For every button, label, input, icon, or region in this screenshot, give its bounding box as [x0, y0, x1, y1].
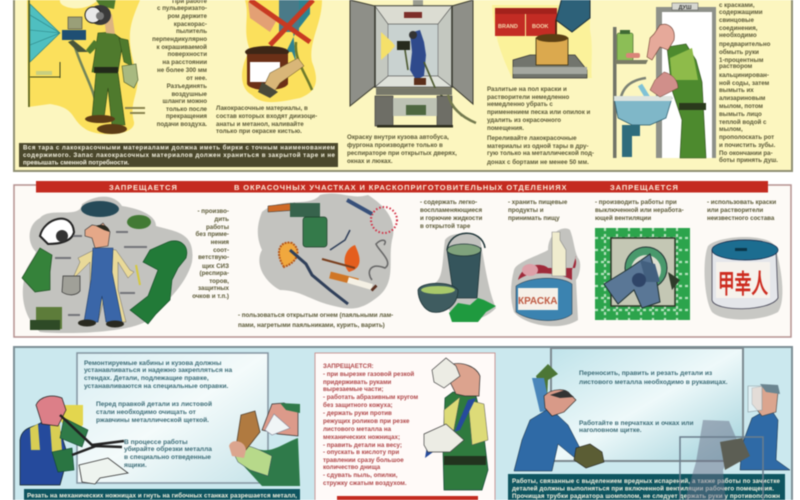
- text: unknown paint rule: - использовать краски: [707, 199, 776, 206]
- text: spray rule: от нее.: [186, 75, 207, 82]
- text: without PPE: без приме-: [196, 231, 229, 238]
- illustration: worker with metal shears: [20, 396, 128, 485]
- text: spilled paint rule: гую только на металлической под-: [487, 150, 594, 157]
- text: open flame rule: [238, 312, 393, 329]
- panel: prohibited in paint areas: [14, 181, 791, 337]
- text: skin washing rule: прополоскать рот: [719, 134, 774, 141]
- panel: prohibited actions: ЗАПРЕЩАЕТСЯ:: [323, 363, 374, 370]
- callout: container storage rule: [19, 143, 338, 167]
- board: glove and goggles instructions: Переносить, править и резать детали из: [579, 370, 713, 377]
- text: without PPE: соот-: [213, 247, 229, 254]
- text: skin washing rule: предварительно: [719, 41, 771, 48]
- panel: prohibited actions: [315, 353, 495, 500]
- callout: harmful vapors rule: Прочищая трубки радиатора шомполом, не следует держать руки у противоположн: [512, 493, 780, 500]
- text: spilled paint rule: донах с бортами не менее 50 мм.: [487, 159, 589, 166]
- text: ventilation rule: ющей вентиляции: [595, 215, 651, 222]
- text: skin washing rule: содержащими: [719, 9, 763, 16]
- text: without PPE: [192, 208, 230, 300]
- banner: prohibited heading: ЗАПРЕЩАЕТСЯ: [610, 183, 679, 192]
- panel: prohibited actions: - при вырезке газовой резкой: [323, 371, 414, 378]
- text: skin washing rule: соединения,: [719, 25, 758, 32]
- text: open flame rule: пами, нагретыми паяльниками, курить, варить): [238, 322, 385, 329]
- banner: lower red strip: [337, 496, 478, 500]
- text: skin washing rule: вымыть их: [719, 87, 754, 94]
- text: spray rule: не более 300 мм: [157, 67, 207, 74]
- text: without PPE: нения: [211, 239, 229, 246]
- board: repair instructions: стали необходимо очищать от: [96, 408, 197, 416]
- text: spray rule: Разъединять: [167, 83, 207, 90]
- text: flammable liquids rule: - содержать легко-: [420, 199, 477, 206]
- text: spilled paint rule: немедленно убрать с: [487, 101, 553, 108]
- illustration: worker with wire brush: [229, 403, 300, 486]
- text: ventilation rule: выключенной или неработа-: [595, 207, 684, 214]
- illustration: paint can with milk bottle: КРАСКА: [518, 296, 557, 307]
- text: booth rule: окнах и люках.: [347, 158, 393, 165]
- watermark logo: [680, 420, 763, 500]
- text: open flame rule: - пользоваться открытым огнем (паяльными лам-: [238, 312, 393, 319]
- text: booth rule: респираторе при открытых дверях,: [347, 150, 457, 157]
- text: without PPE: ветствую-: [198, 254, 229, 261]
- text: without PPE: - произво-: [197, 208, 229, 215]
- text: spray rule: к окрашиваемой: [157, 44, 207, 51]
- text: spray rule: краскорас-: [174, 21, 207, 28]
- panel: prohibited actions: - опускать в кислоту при: [323, 449, 399, 456]
- text: spilled paint rule: растворители немедленно: [487, 94, 570, 101]
- text: flammable liquids rule: и горючие жидкости: [420, 215, 482, 222]
- banner: prohibited heading: ЗАПРЕЩАЕТСЯ: [109, 183, 178, 192]
- panel: prohibited actions: травлении сразу большое: [323, 457, 404, 464]
- text: without PPE: торов,: [209, 278, 229, 285]
- illustration: paint can with milk bottle: [511, 228, 580, 326]
- text: spilled paint rule: Переливайте лакокрасочные: [487, 135, 577, 142]
- text: skin washing rule: свинцовые: [719, 17, 754, 24]
- illustration: spray painter: [27, 0, 145, 134]
- text: skin washing rule: теплой водой с: [719, 119, 767, 126]
- panel: prohibited actions: - править детали на весу;: [323, 442, 402, 449]
- text: spray rule: прекращения: [166, 113, 207, 120]
- panel: prohibited actions: листового металла на: [323, 426, 392, 433]
- text: ventilation rule: - производить работы при: [595, 199, 677, 206]
- text: spray rule: на расстоянии: [162, 59, 207, 66]
- text: skin washing rule: мылом, потом: [719, 103, 763, 110]
- panel: prohibited actions: режущих роликов при резке: [323, 418, 410, 425]
- text: spilled paint rule: [487, 86, 594, 166]
- text: spray rule: пылитель: [176, 28, 207, 35]
- text: lacquer materials: анаты и метанол, наливайте: [216, 121, 304, 128]
- panel: prohibited actions: - держать руки против: [323, 410, 392, 417]
- illustration: worker washing at sink: [613, 3, 716, 158]
- text: unknown paint rule: неизвестного состава: [707, 215, 775, 222]
- text: booth rule: Окраску внутри кузова автобуса,: [347, 134, 449, 141]
- text: spray rule: перпендикулярно: [152, 36, 207, 43]
- text: lacquer materials: состав которых входят диизоци-: [216, 113, 317, 120]
- text: spray rule: подачи воздуха.: [157, 121, 207, 128]
- illustration: spray booth: [350, 0, 476, 128]
- text: booth rule: [347, 134, 457, 165]
- text: spray rule: [152, 0, 208, 128]
- callout: container storage rule: содержимого. Запас лакокрасочных материалов должен храниться в закрытой таре и не: [23, 152, 336, 159]
- illustration: worker and protective equipment: [22, 197, 193, 333]
- board: glove and goggles instructions: наголовном щитке.: [579, 427, 642, 434]
- text: without PPE: дить: [214, 216, 229, 223]
- board: repair instructions: ржавчины металлической щеткой.: [96, 416, 209, 424]
- board: glove and goggles instructions: Работайте в перчатках и очках или: [579, 419, 694, 427]
- text: skin washing rule: мылом,: [719, 126, 743, 133]
- text: skin washing rule: 1-процентным: [719, 57, 764, 64]
- panel: prohibited actions: придерживать руками: [323, 379, 392, 386]
- illustration: open bucket and rag: [418, 233, 496, 322]
- text: without PPE: щих СИЗ: [202, 263, 229, 270]
- text: skin washing rule: ализариновым: [719, 95, 766, 102]
- text: spilled paint rule: Разлитые на пол краски и: [487, 86, 567, 93]
- board: repair instructions: [77, 353, 268, 483]
- text: spilled paint rule: помещения.: [487, 125, 524, 132]
- text: flammable liquids rule: воспламеняющиеся: [420, 207, 482, 214]
- text: spilled paint rule: материалы из одной тары в дру-: [487, 143, 589, 150]
- text: spray rule: ром держите: [167, 13, 208, 20]
- text: skin washing rule: боты принять душ.: [719, 157, 778, 164]
- text: food rule: продукты и: [508, 207, 544, 214]
- panel: prohibited actions: стружку сжатым воздухом.: [323, 480, 407, 487]
- text: unknown paint rule: [707, 199, 776, 222]
- board: repair instructions: устанавливаются на специальные оправки.: [84, 383, 229, 390]
- text: lacquer materials: Лакокрасочные материалы, в: [216, 105, 308, 112]
- callout: harmful vapors rule: деталей должны выполняться при включенной вентиляции рабочего помещения.: [512, 486, 774, 492]
- illustration: worker washing at sink: ДУШ: [679, 5, 692, 11]
- text: flammable liquids rule: в открытой таре: [420, 223, 471, 230]
- text: unknown paint rule: или растворители: [707, 207, 763, 214]
- panel: metal cutting safety: [14, 347, 792, 500]
- board: repair instructions: ящики.: [124, 462, 147, 469]
- illustration: unknown paint can: 甲幸人: [718, 269, 768, 299]
- illustration: pouring paint over tray: BOOK: [532, 24, 549, 30]
- illustration: unknown paint can: [705, 237, 782, 320]
- callout: container storage rule: превышать сменной потребности.: [23, 160, 129, 166]
- board: repair instructions: В процессе работы: [124, 438, 188, 446]
- text: skin washing rule: обмыть руки: [719, 49, 759, 56]
- text: lacquer materials: только при окраске кистью.: [216, 128, 302, 135]
- illustration: worker with face shield: [740, 384, 790, 470]
- text: skin washing rule: с красками,: [719, 2, 755, 9]
- board: repair instructions: Ремонтируемые кабины и кузова должны: [84, 359, 222, 367]
- text: skin washing rule: ной соды, затем: [719, 80, 770, 87]
- panel: prohibited actions: - сдувать пыль, опилки,: [323, 472, 398, 479]
- text: without PPE: защитных: [198, 285, 230, 292]
- text: spray rule: с пульверизато-: [157, 5, 207, 12]
- text: without PPE: (респира-: [200, 270, 229, 277]
- board: repair instructions: убирайте обрезки металла: [124, 445, 212, 453]
- text: spray rule: воздушные: [171, 91, 208, 98]
- text: skin washing rule: необходимо: [719, 32, 757, 39]
- text: food rule: принимать пищу: [508, 215, 560, 222]
- board: glove and goggles instructions: [551, 348, 743, 461]
- board: repair instructions: стендах. Детали, подлежащие правке,: [84, 375, 209, 382]
- illustration: worker carrying sheet metal: [514, 364, 604, 471]
- panel: prohibited actions: механических ножницах;: [323, 434, 400, 441]
- text: skin washing rule: [719, 2, 778, 164]
- board: repair instructions: Перед правкой детали из листовой: [96, 400, 212, 408]
- text: skin washing rule: и почистить зубы.: [719, 142, 776, 149]
- panel: prohibited actions: без защитного кожуха;: [323, 402, 393, 409]
- illustration: broken ventilation fan: [595, 228, 690, 320]
- panel: prohibited actions: - работать абразивным кругом: [323, 394, 418, 401]
- text: spray rule: поверхности: [167, 51, 207, 58]
- illustration: injured worker: [424, 358, 488, 490]
- text: lacquer materials: [216, 105, 317, 135]
- text: food rule: [508, 199, 568, 222]
- text: skin washing rule: вымыть лицо: [719, 111, 762, 118]
- text: food rule: - хранить пищевые: [508, 199, 568, 206]
- text: spilled paint rule: удалить из окрасочного: [487, 117, 561, 124]
- banner: prohibited heading: [36, 181, 768, 192]
- callout: container storage rule: Вся тара с лакокрасочными материалами должна иметь бирки с точным наименованием: [23, 144, 335, 152]
- text: skin washing rule: раствором: [719, 63, 753, 70]
- illustration: open flame sources: [258, 194, 397, 309]
- illustration: pouring paint over tray: BRAND: [498, 24, 518, 30]
- illustration: pouring paint over tray: [492, 0, 592, 78]
- panel: paint shop hygiene rules: [14, 0, 792, 171]
- text: spilled paint rule: применением песка или опилок и: [487, 109, 591, 116]
- text: spray rule: шланги можно: [163, 98, 207, 105]
- board: repair instructions: устанавливаться и надежно закрепляться на: [84, 367, 232, 374]
- text: booth rule: фургона производите только в: [347, 142, 443, 149]
- board: repair instructions: в специально отведенные: [124, 454, 211, 461]
- text: skin washing rule: кальцинирован-: [719, 72, 769, 79]
- text: flammable liquids rule: [420, 199, 482, 230]
- text: without PPE: очков и т.п.): [192, 293, 229, 300]
- board: glove and goggles instructions: листового металла необходимо в рукавицах.: [579, 378, 728, 386]
- callout: harmful vapors rule: Работы, связанные с выделением вредных испарений, а также работы по зачистке: [512, 478, 781, 485]
- panel: prohibited actions: вырезаемые части;: [323, 386, 384, 393]
- illustration: forbidden spray gun and permitted brush: [242, 0, 322, 102]
- banner: prohibited heading: В ОКРАСОЧНЫХ УЧАСТКАХ И КРАСКОПРИГОТОВИТЕЛЬНЫХ ОТДЕЛЕНИЯХ: [234, 183, 567, 192]
- panel: prohibited actions: количество днища: [323, 464, 381, 471]
- text: spray rule: только после: [166, 106, 208, 113]
- callout: metal cutting rule: [24, 489, 300, 500]
- text: ventilation rule: [595, 199, 684, 222]
- text: without PPE: работы: [206, 224, 229, 231]
- text: skin washing rule: По окончании ра-: [719, 150, 773, 157]
- callout: metal cutting rule: Резать на механических ножницах и гнуть на гибочных станках разрешается металл,: [27, 492, 297, 500]
- callout: harmful vapors rule: [508, 474, 785, 500]
